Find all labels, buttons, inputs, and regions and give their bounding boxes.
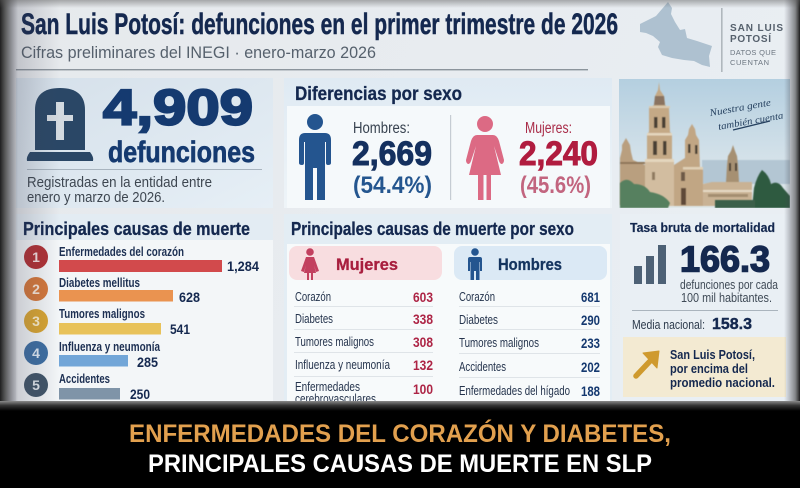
right nave — [703, 182, 752, 206]
map of San Luis Potosí — [640, 2, 712, 67]
column: mujeres: 132 — [413, 358, 433, 373]
cause 3: 541 — [170, 321, 190, 337]
rate value: 166.3 — [680, 238, 770, 280]
cause 4: 4 — [32, 345, 40, 361]
column: hombres: 202 — [581, 360, 600, 375]
central facade and second tower — [674, 124, 703, 206]
mujeres figures: Mujeres: — [525, 120, 572, 137]
description — [27, 175, 212, 206]
description: enero y marzo de 2026. — [27, 190, 165, 206]
cause 2: 628 — [179, 289, 200, 305]
cathedral building — [620, 82, 752, 206]
hombres figures: 2,669 — [352, 135, 432, 173]
callout: San Luis Potosí, — [670, 348, 755, 362]
cause 3: 3 — [32, 313, 40, 329]
column: mujeres: Mujeres — [336, 255, 398, 274]
national average: 158.3 — [712, 316, 752, 333]
cause 4 — [24, 340, 161, 370]
callout — [623, 337, 786, 397]
brand block — [730, 23, 783, 67]
cause 1: Enfermedades del corazón — [59, 245, 184, 259]
column: mujeres — [289, 246, 442, 406]
trees — [620, 170, 790, 208]
panel: causas por sexo — [284, 214, 612, 406]
photo: catedral — [619, 79, 790, 208]
handwritten note: Nuestra gente — [708, 97, 772, 119]
big number: 4,909 — [103, 80, 253, 136]
cause 2 — [24, 276, 200, 305]
column: hombres: Accidentes — [459, 359, 506, 374]
panel: principales causas de muerte — [16, 214, 273, 404]
cause 5: 250 — [130, 386, 150, 402]
column: hombres — [454, 246, 607, 399]
icon: bars — [634, 245, 666, 284]
left wing — [620, 138, 645, 205]
brand block: POTOSÍ — [730, 32, 771, 45]
column: mujeres: 603 — [413, 290, 433, 305]
column: mujeres: Corazón — [295, 289, 331, 304]
column: hombres: Corazón — [459, 289, 495, 304]
column: hombres: Tumores malignos — [459, 335, 539, 350]
cause 2: Diabetes mellitus — [59, 276, 140, 290]
national average — [632, 316, 752, 333]
hombres figures: (54.4%) — [353, 172, 432, 199]
column: hombres: Diabetes — [459, 312, 498, 327]
cause 4: Influenza y neumonía — [59, 340, 161, 354]
column: mujeres: Influenza y neumonía — [295, 357, 391, 372]
mujeres figures: (45.6%) — [520, 172, 591, 199]
icon: man small — [468, 248, 482, 280]
rate description: 100 mil habitantes. — [681, 291, 772, 305]
cause 1: 1 — [32, 249, 40, 265]
rate description: defunciones por cada — [680, 278, 778, 292]
column: mujeres: Diabetes — [295, 311, 333, 326]
heading: Diferencias por sexo — [295, 84, 462, 105]
column: mujeres: 308 — [413, 335, 433, 350]
cause 1: 1,284 — [227, 258, 259, 274]
cause 3: Tumores malignos — [59, 307, 145, 321]
cause 2: 2 — [32, 281, 40, 297]
heading: Principales causas de muerte por sexo — [291, 218, 574, 239]
icon: man — [299, 114, 331, 200]
column: mujeres: Tumores malignos — [295, 334, 374, 349]
hombres figures: Hombres: — [353, 120, 410, 137]
panel: tasa bruta de mortalidad — [620, 214, 790, 404]
callout: promedio nacional. — [670, 376, 775, 390]
column: hombres: Enfermedades del hígado — [459, 383, 570, 398]
column: mujeres: 338 — [413, 312, 433, 327]
description: Registradas en la entidad entre — [27, 175, 212, 191]
mujeres figures: 2,240 — [519, 135, 598, 173]
icon: woman small — [301, 248, 319, 280]
heading: Tasa bruta de mortalidad — [630, 220, 775, 235]
column: mujeres: cerebrovasculares — [295, 391, 376, 406]
brand block: SAN LUIS — [730, 23, 783, 34]
column: mujeres: Enfermedades — [295, 379, 360, 394]
panel: total defunciones — [16, 78, 273, 208]
cause 5 — [24, 372, 150, 402]
column: hombres: 290 — [581, 313, 600, 328]
unit: defunciones — [108, 136, 255, 169]
icon: tombstone — [27, 88, 93, 161]
cause 3 — [24, 307, 190, 337]
icon: woman — [466, 116, 504, 200]
cause 5: Accidentes — [59, 372, 110, 386]
heading: Principales causas de muerte — [23, 218, 250, 239]
handwritten note: también cuenta — [717, 110, 784, 133]
handwritten note — [710, 100, 783, 130]
panel: diferencias por sexo — [284, 78, 612, 208]
national average: Media nacional: — [632, 317, 705, 332]
banner line 1: ENFERMEDADES DEL CORAZÓN Y DIABETES, — [129, 418, 671, 448]
cause 5: 5 — [32, 377, 40, 393]
brand block: CUENTAN — [730, 58, 769, 67]
column: mujeres: 100 — [413, 382, 433, 397]
callout: por encima del — [670, 362, 748, 376]
rate description — [680, 278, 778, 305]
brand block: DATOS QUE — [730, 48, 776, 57]
column: hombres: Hombres — [498, 255, 562, 274]
column: hombres: 681 — [581, 290, 600, 305]
banner — [0, 401, 800, 488]
banner line 2: PRINCIPALES CAUSAS DE MUERTE EN SLP — [148, 450, 652, 478]
main tower — [646, 82, 672, 160]
cause 1 — [24, 245, 259, 274]
third tower — [726, 145, 739, 182]
mujeres figures — [519, 120, 598, 199]
column: hombres: 188 — [581, 384, 600, 399]
icon: arrow up-right — [636, 351, 659, 376]
subtitle: Cifras preliminares del INEGI · enero-marzo 2026 — [21, 44, 376, 62]
column: hombres: 233 — [581, 336, 600, 351]
hombres figures — [352, 120, 432, 199]
cause 4: 285 — [137, 354, 158, 370]
